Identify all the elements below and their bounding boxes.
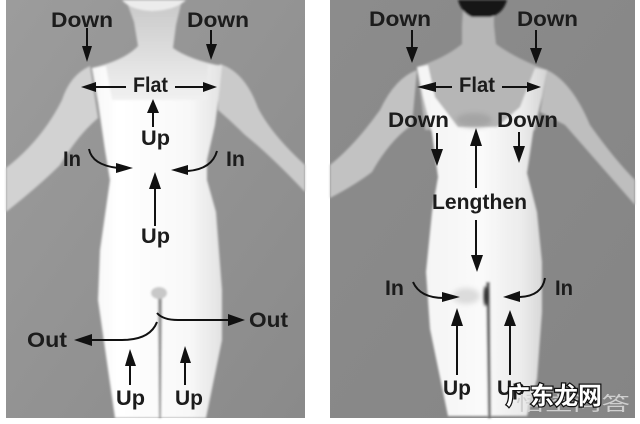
arrow: chest up	[147, 99, 159, 127]
arrow: down right shoulder	[206, 30, 217, 60]
arrow: down left shoulder	[406, 30, 418, 63]
label: In right: In	[555, 277, 573, 300]
arrow: down left back	[431, 133, 443, 166]
watermark: grey site name: 悟空问答	[516, 393, 630, 415]
arrow: left leg up	[125, 349, 136, 385]
label: Lengthen: Lengthen	[432, 191, 527, 214]
arrow: down left shoulder	[82, 28, 92, 62]
arrow: in left	[89, 149, 133, 173]
label: Up right leg: Up	[175, 387, 203, 410]
arrow: lengthen up	[470, 128, 482, 188]
arrow: right leg up	[504, 310, 516, 375]
label: Down right back: Down	[497, 109, 558, 132]
panel: back view photo	[330, 0, 635, 418]
panel: front view photo	[6, 0, 305, 418]
label: Up torso: Up	[141, 225, 170, 248]
label: Up right leg: Up	[497, 377, 525, 400]
label: Flat: Flat	[459, 74, 495, 97]
label: Down left: Down	[369, 8, 431, 31]
label: In right: In	[226, 148, 245, 171]
figure: back body	[330, 0, 635, 418]
figure: front body	[6, 0, 305, 418]
label: Up chest: Up	[141, 127, 170, 150]
watermark: white site name: 广东龙网	[506, 383, 602, 410]
arrow: in left	[413, 282, 460, 302]
label: In left: In	[63, 148, 81, 171]
arrow: out left	[74, 322, 157, 346]
arrow: in right	[171, 151, 217, 175]
arrow: down right shoulder	[530, 30, 542, 64]
label: Flat: Flat	[133, 74, 168, 97]
label: Out right: Out	[249, 309, 288, 332]
arrow: torso up	[149, 172, 161, 226]
arrow: left leg up	[451, 308, 463, 375]
arrow: flat left	[81, 82, 126, 92]
arrow: down right back	[513, 132, 525, 163]
arrow: flat right	[502, 82, 541, 92]
label: Down right: Down	[517, 8, 578, 31]
arrow: lengthen down	[471, 220, 483, 272]
label: In left: In	[385, 277, 404, 300]
label: Up left leg: Up	[116, 387, 145, 410]
arrow: flat right	[175, 82, 217, 92]
label: Out left: Out	[27, 329, 67, 352]
label: Down left back: Down	[388, 109, 449, 132]
arrow: right leg up	[180, 346, 191, 385]
label: Up left leg: Up	[443, 377, 471, 400]
arrow: in right	[503, 278, 545, 302]
arrow: out right	[157, 313, 245, 326]
arrow: flat left	[417, 82, 452, 92]
label: Down right: Down	[187, 9, 249, 32]
label: Down left: Down	[51, 9, 113, 32]
